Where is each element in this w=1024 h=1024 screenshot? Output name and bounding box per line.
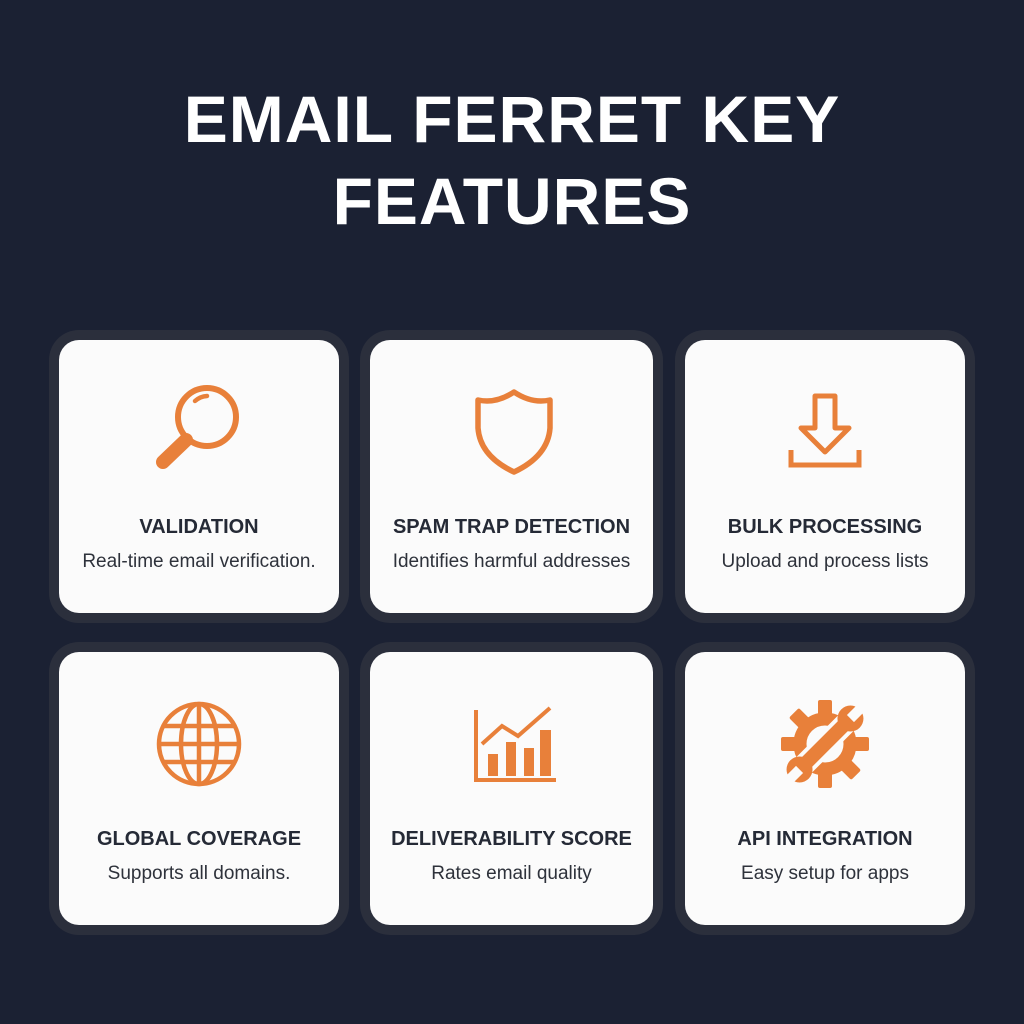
icon: gear and wrench <box>781 700 869 788</box>
heading: VALIDATION <box>139 516 259 538</box>
icon: download <box>788 394 862 468</box>
heading: GLOBAL COVERAGE <box>97 828 301 850</box>
icon: bar chart <box>474 706 556 782</box>
panel: api integration <box>675 642 975 935</box>
icon: shield <box>475 389 553 475</box>
description: Upload and process lists <box>722 551 928 572</box>
panel: bulk processing <box>675 330 975 623</box>
heading: DELIVERABILITY SCORE <box>391 828 632 850</box>
panel: deliverability score <box>360 642 663 935</box>
description: Rates email quality <box>431 863 592 884</box>
heading: SPAM TRAP DETECTION <box>393 516 630 538</box>
heading: API INTEGRATION <box>737 828 913 850</box>
description: Supports all domains. <box>108 863 290 884</box>
description: Easy setup for apps <box>741 863 909 884</box>
title: FEATURES <box>333 164 691 238</box>
description: Identifies harmful addresses <box>393 551 630 572</box>
heading: BULK PROCESSING <box>728 516 922 538</box>
panel: spam trap <box>360 330 663 623</box>
icon: globe <box>156 702 242 786</box>
title <box>184 82 840 238</box>
panel: validation <box>49 330 349 623</box>
description: Real-time email verification. <box>82 551 316 572</box>
title: EMAIL FERRET KEY <box>184 82 840 156</box>
panel: global coverage <box>49 642 349 935</box>
icon: magnifier <box>156 385 239 469</box>
